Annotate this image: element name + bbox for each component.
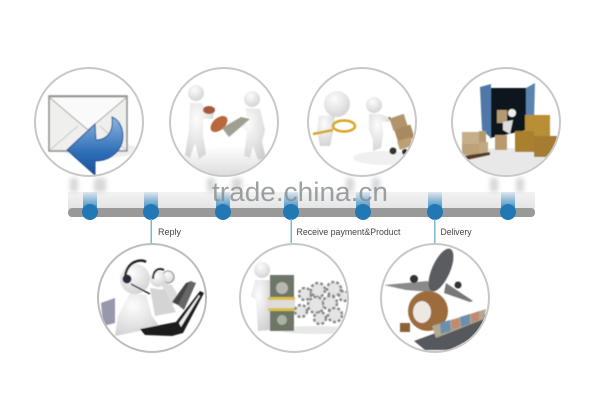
icon: small crates <box>400 323 410 332</box>
panel: delivery <box>381 244 489 352</box>
icon: document <box>222 117 250 137</box>
icon: container <box>480 83 535 138</box>
icon: reply arrow <box>67 117 123 175</box>
panel: inspection and cart <box>308 68 417 176</box>
panel: customer service <box>98 244 206 352</box>
panel: payment and gears <box>240 244 351 352</box>
icon: right boxes <box>515 115 557 157</box>
label: Delivery: Delivery <box>440 227 472 237</box>
icon: figure with hand truck <box>366 97 415 155</box>
icon: laptop <box>140 291 204 336</box>
icon: stamp <box>210 115 228 133</box>
panel: container loading <box>452 68 560 176</box>
icon: globe <box>408 291 448 331</box>
icon: cargo ship <box>414 314 487 350</box>
icon: front operator <box>115 261 160 336</box>
icon: figure with magnifier <box>313 91 355 146</box>
icon: worker <box>495 109 516 150</box>
icon: envelope <box>49 96 127 151</box>
icon: back operators <box>150 269 196 316</box>
panel: negotiating figures <box>170 68 278 186</box>
icon: monitor <box>101 298 115 326</box>
label: Receive payment & Product: Receive payment&Product <box>296 227 401 237</box>
icon: gears <box>295 282 349 324</box>
icon: right figure <box>242 91 266 160</box>
icon: left boxes <box>462 131 490 160</box>
icon: left figure <box>185 85 214 159</box>
icon: figure <box>251 262 270 331</box>
icon: money stacks <box>268 275 295 331</box>
watermark: trade.china.cn <box>212 177 388 207</box>
timeline <box>68 178 535 243</box>
label: Reply: Reply <box>158 227 181 237</box>
infographic <box>34 67 561 353</box>
icon: airplane <box>384 245 473 302</box>
panel: inquiry envelope <box>35 68 143 176</box>
